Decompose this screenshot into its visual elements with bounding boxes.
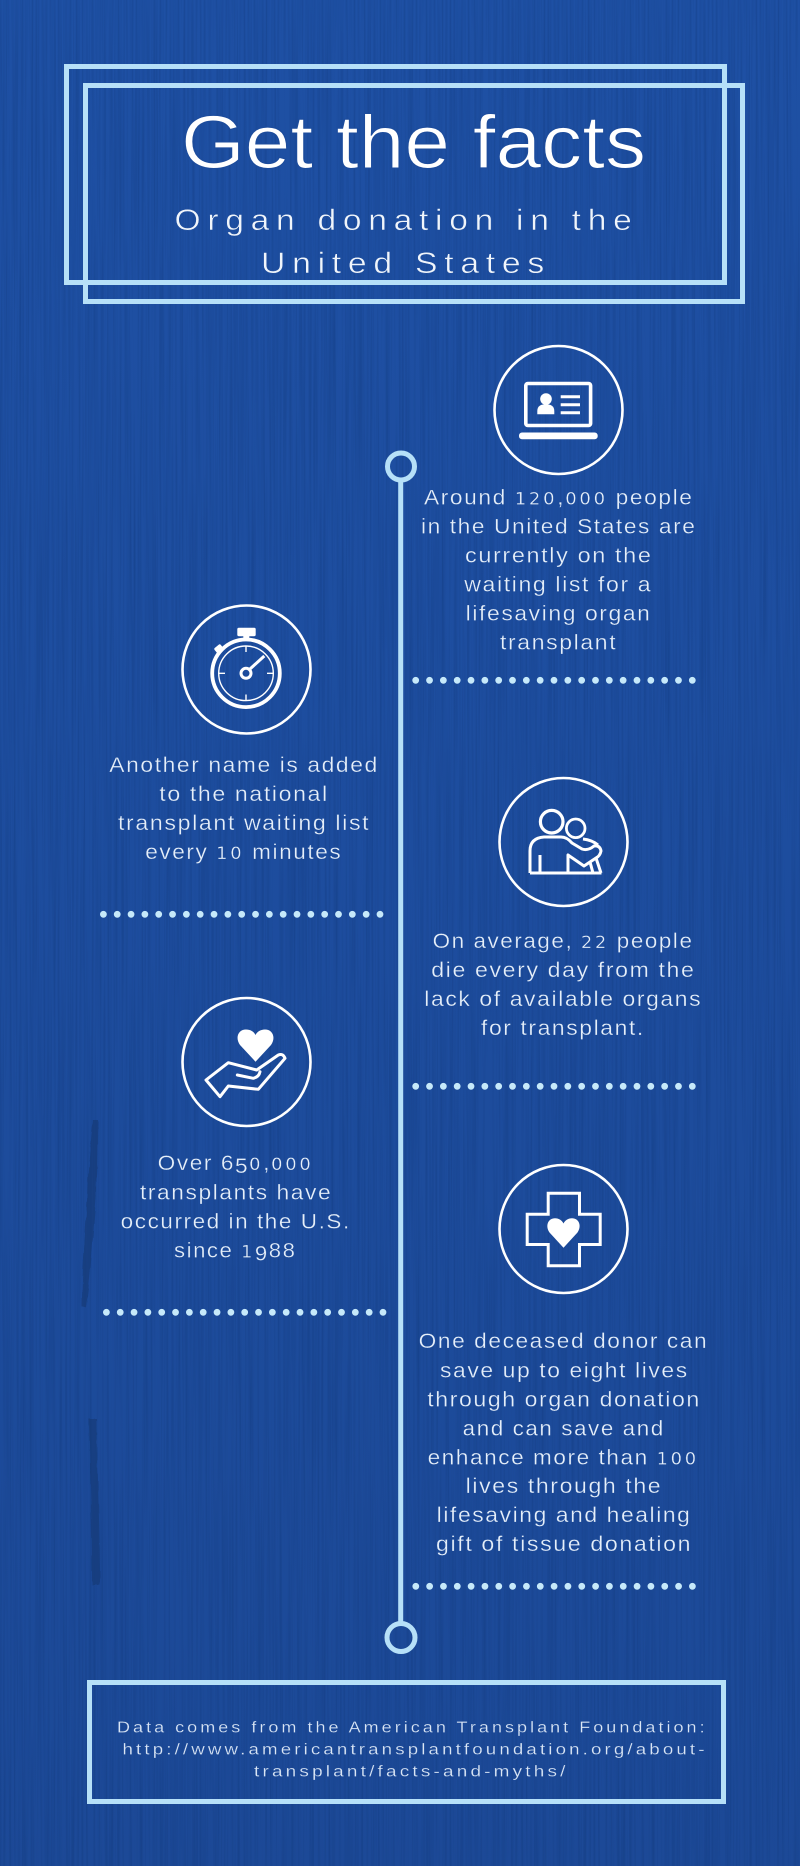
text: fact 4: 9 bbox=[255, 1241, 269, 1265]
subtitle bbox=[174, 204, 638, 280]
subtitle: United States bbox=[261, 247, 551, 280]
text: fact 3: On average, 22 people bbox=[433, 929, 694, 953]
icon: stopwatch bbox=[182, 606, 310, 734]
fact 4: 650,000 transplants bbox=[106, 998, 384, 1312]
text: fact 5: save up to eight lives bbox=[440, 1358, 689, 1382]
source panel bbox=[90, 1682, 724, 1802]
text: fact 1 bbox=[421, 485, 696, 654]
text: fact 5: lives through the bbox=[466, 1474, 662, 1498]
text: fact 3 bbox=[424, 929, 702, 1040]
text: fact 2: Another name is added bbox=[109, 753, 379, 777]
fact 1: waiting list bbox=[416, 346, 696, 680]
text: fact 4: occurred in the U.S. bbox=[121, 1209, 351, 1233]
icon: medical cross with heart bbox=[500, 1165, 628, 1293]
text: fact 4 bbox=[121, 1151, 351, 1265]
source text bbox=[117, 1719, 708, 1780]
text: fact 1: transplant bbox=[500, 630, 617, 654]
text: fact 1: waiting list for a bbox=[463, 572, 652, 596]
icon: two people embracing bbox=[500, 778, 628, 906]
text: fact 4: Over 6 bbox=[158, 1151, 231, 1175]
icon: laptop with profile card bbox=[494, 346, 622, 474]
text: fact 1: lifesaving organ bbox=[466, 601, 652, 625]
text: fact 2: transplant waiting list bbox=[118, 811, 370, 835]
dotted divider bbox=[416, 1583, 693, 1590]
text: fact 5: gift of tissue donation bbox=[436, 1532, 692, 1556]
text: fact 3: lack of available organs bbox=[424, 987, 702, 1011]
text: fact 2 bbox=[109, 753, 379, 864]
text: fact 4: 0 bbox=[249, 1155, 263, 1175]
text: fact 4: 5 bbox=[235, 1154, 249, 1178]
fact 3: 22 people die every day bbox=[416, 778, 702, 1086]
text: fact 5: through organ donation bbox=[427, 1387, 701, 1411]
text: fact 3: for transplant. bbox=[481, 1016, 645, 1040]
title: Get the facts bbox=[181, 100, 646, 184]
text: fact 5 bbox=[419, 1329, 708, 1556]
text: fact 5: lifesaving and healing bbox=[437, 1503, 692, 1527]
text: fact 2: to the national bbox=[159, 782, 329, 806]
fact 2: name added every 10 minutes bbox=[103, 606, 381, 914]
subtitle: Organ donation in the bbox=[174, 204, 638, 237]
text: fact 4: since 1 bbox=[174, 1238, 255, 1262]
icon: hand holding heart bbox=[182, 998, 310, 1126]
dotted divider bbox=[103, 911, 381, 918]
fact 5: one donor saves eight lives bbox=[416, 1165, 708, 1586]
text: fact 4: 88 bbox=[269, 1238, 296, 1262]
title frame: back rectangle bbox=[66, 66, 724, 282]
dotted divider bbox=[416, 677, 693, 684]
timeline bbox=[387, 453, 415, 1652]
text: fact 5: One deceased donor can bbox=[419, 1329, 708, 1353]
dotted divider bbox=[416, 1083, 693, 1090]
text: fact 5: and can save and bbox=[463, 1416, 665, 1440]
dotted divider bbox=[106, 1309, 384, 1316]
text: fact 4: transplants have bbox=[140, 1180, 332, 1204]
source text: http://www.americantransplantfoundation.org/about- bbox=[122, 1741, 708, 1758]
text: fact 1: Around 120,000 people bbox=[424, 485, 694, 509]
text: fact 1: in the United States are bbox=[421, 514, 696, 538]
text: fact 1: currently on the bbox=[465, 543, 652, 567]
text: fact 3: die every day from the bbox=[431, 958, 696, 982]
source text: transplant/facts-and-myths/ bbox=[254, 1763, 569, 1780]
text: fact 4: ,000 bbox=[263, 1151, 311, 1175]
source text: Data comes from the American Transplant Foundation: bbox=[117, 1719, 708, 1736]
text: fact 5: enhance more than 100 bbox=[428, 1445, 699, 1469]
text: fact 2: every 10 minutes bbox=[145, 840, 342, 864]
title frame: front rectangle bbox=[86, 86, 742, 302]
